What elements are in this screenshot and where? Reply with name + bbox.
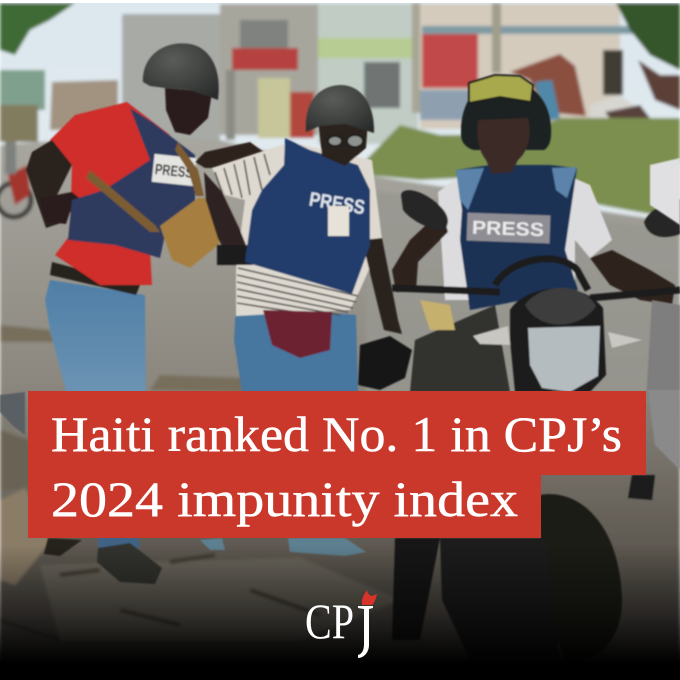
road debris [0, 325, 250, 392]
bottom dark fade [0, 545, 680, 680]
camera [358, 336, 412, 390]
fanny pack [263, 310, 332, 358]
tan bag [160, 198, 228, 268]
forearm and hand [204, 172, 250, 262]
neck and face [318, 120, 368, 166]
torso shirt [438, 172, 612, 300]
neck and head [165, 88, 212, 135]
red banner shape [28, 391, 646, 538]
headline banner [28, 391, 646, 538]
red shirt [50, 102, 170, 285]
blue vest [245, 138, 370, 294]
CPJ logo [305, 590, 377, 658]
jeans [234, 305, 358, 392]
logo letters: CP [305, 593, 354, 649]
top white edge [0, 0, 680, 3]
goggles [469, 75, 533, 103]
jeans [45, 280, 146, 392]
journalist 3 on motorcycle [392, 75, 680, 662]
indicators [473, 326, 642, 348]
motorcycle mirrors [401, 190, 448, 230]
right arm with camera [362, 238, 402, 334]
press label [467, 213, 550, 243]
rubble and tarps [510, 54, 586, 116]
distant trees [0, 70, 45, 110]
vest [456, 165, 578, 310]
logo flame [362, 590, 377, 605]
helmet [143, 43, 219, 100]
armored truck [0, 105, 38, 142]
outstretched arm [195, 142, 268, 168]
press vest [68, 108, 195, 258]
headline line 2: 2024 impunity index [51, 471, 518, 527]
distant buildings [122, 14, 220, 140]
striped shirt [212, 142, 382, 316]
vest label: PRESS [308, 189, 366, 219]
journalist 2 in striped shirt and press vest [200, 85, 412, 556]
logo letter J [358, 606, 373, 658]
shoes [288, 538, 366, 556]
tree top left [0, 3, 75, 55]
fork and frame [410, 305, 510, 392]
press label: PRESS [154, 161, 194, 182]
face and neck [477, 118, 530, 174]
person at right edge [628, 158, 680, 500]
press label [152, 154, 196, 186]
fairing [510, 288, 606, 392]
lower legs and shoes [98, 535, 140, 548]
headlight [528, 326, 600, 392]
parked motorcycle [0, 183, 31, 217]
handlebars [392, 259, 680, 298]
press label: PRESS [472, 218, 544, 241]
id badge [328, 206, 349, 236]
glasses [328, 135, 363, 147]
arms [392, 210, 448, 292]
road right lighter [366, 190, 680, 400]
tree top right [616, 3, 680, 70]
headline line 1: Haiti ranked No. 1 in CPJ’s [51, 406, 622, 462]
belt [50, 262, 140, 295]
helmet dome [461, 80, 551, 150]
photographer 1 in red shirt, running [0, 43, 268, 584]
arm [26, 140, 72, 228]
green vegetation [366, 118, 680, 215]
helmet [306, 85, 374, 133]
lower motorcycle and tire [540, 494, 622, 662]
